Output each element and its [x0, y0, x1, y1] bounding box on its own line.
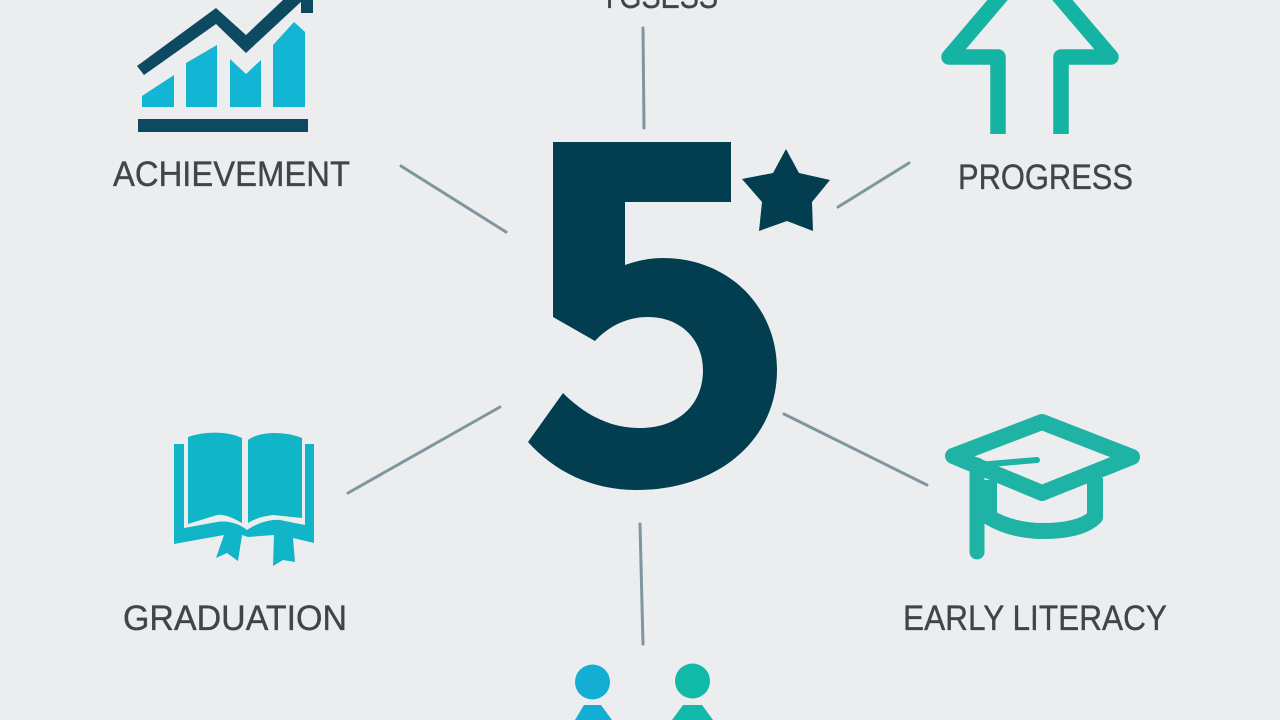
- star: [742, 149, 830, 231]
- label: early literacy: EARLY LITERACY: [903, 599, 1167, 638]
- label: graduation: GRADUATION: [123, 599, 347, 638]
- person right: [672, 664, 713, 720]
- label: progress: PROGRESS: [958, 158, 1133, 197]
- icon: achievement chart: [137, 0, 313, 132]
- central figure: 5 with star: [528, 142, 830, 490]
- numeral 5: [528, 142, 777, 490]
- icon: progress arrow: [949, 0, 1111, 134]
- icon: open book: [174, 433, 314, 566]
- label: achievement: ACHIEVEMENT: [113, 155, 350, 194]
- icon: graduation cap: [953, 422, 1132, 552]
- icon: two people: [575, 664, 713, 720]
- person left: [575, 664, 612, 720]
